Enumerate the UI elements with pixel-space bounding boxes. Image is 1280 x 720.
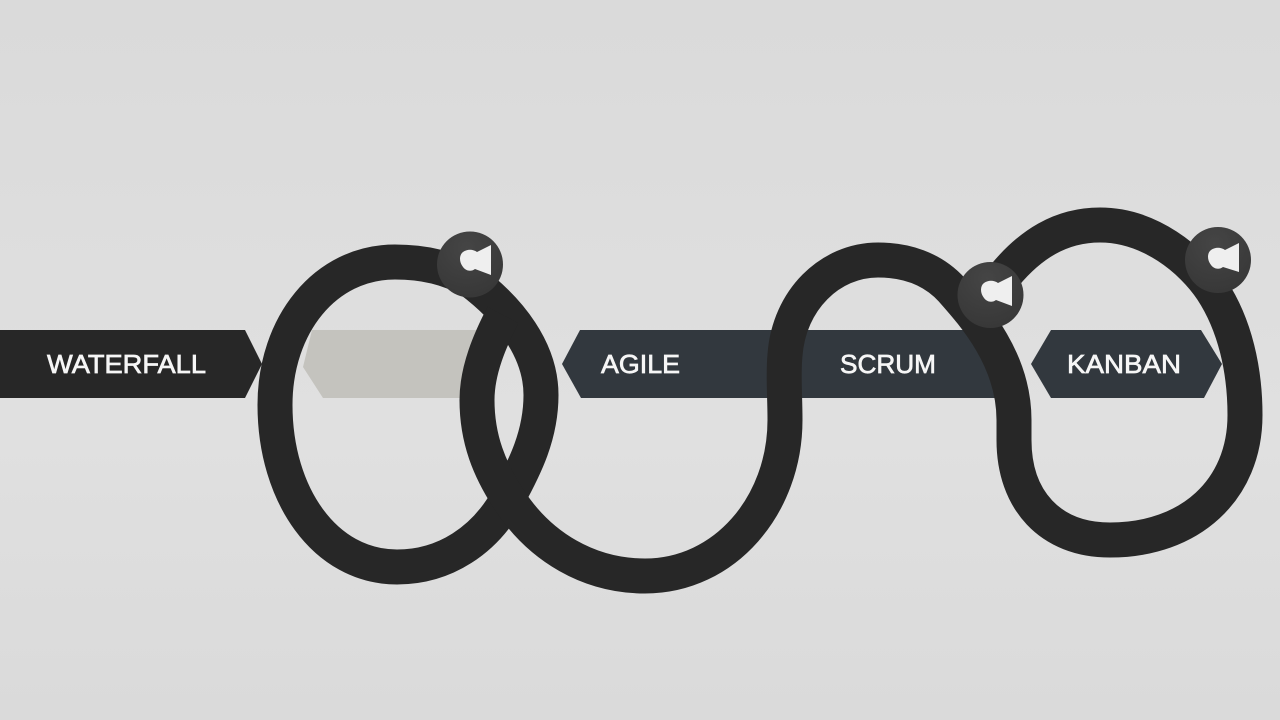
track: first loop	[275, 262, 541, 567]
icon: speaker	[981, 276, 1012, 306]
badge: waterfall marker	[437, 232, 503, 298]
label: agile: AGILE	[601, 349, 680, 379]
label: waterfall	[0, 330, 262, 398]
badge: scrum marker	[958, 262, 1024, 328]
label: scrum: SCRUM	[840, 349, 936, 379]
ghost label: empty	[303, 330, 482, 398]
icon: speaker	[460, 245, 491, 275]
icon: speaker	[1208, 243, 1239, 272]
label: agile	[562, 330, 780, 398]
label: scrum	[790, 330, 996, 398]
track: winding path	[477, 225, 1245, 576]
label: kanban: KANBAN	[1067, 349, 1181, 379]
badge: kanban marker	[1185, 227, 1251, 293]
label: kanban	[1031, 330, 1222, 398]
label: waterfall: WATERFALL	[47, 349, 206, 379]
